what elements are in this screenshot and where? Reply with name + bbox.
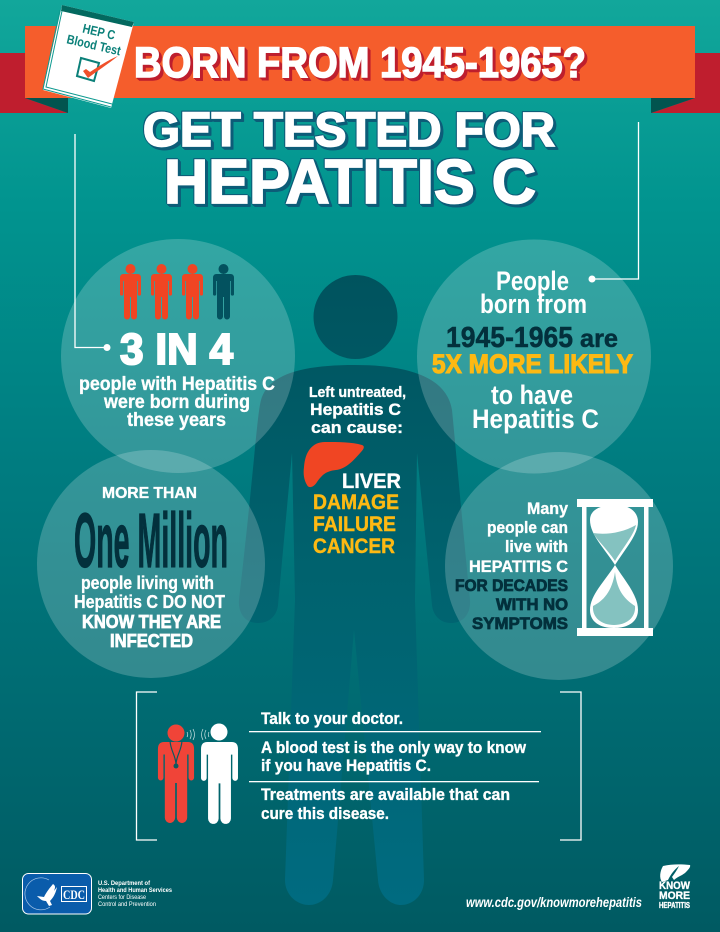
icon: doctor talking xyxy=(158,724,194,823)
text: people living with: KNOW THEY ARE xyxy=(82,612,221,632)
text: hhs agency: U.S. Department of xyxy=(98,880,151,887)
icon: four people, three highlighted xyxy=(120,264,234,320)
heading: born from: BORN FROM 1945-1965? xyxy=(134,39,586,87)
ribbon tails xyxy=(0,53,720,113)
bracket left xyxy=(136,692,157,840)
text: many people: WITH NO xyxy=(496,596,568,614)
checkbox xyxy=(77,56,118,81)
circle: one million xyxy=(37,450,265,678)
text: left untreated: Left untreated, xyxy=(309,384,406,401)
text: liver damage failure cancer: CANCER xyxy=(313,534,395,558)
text: liver damage failure cancer xyxy=(313,469,401,558)
connector line left xyxy=(75,134,110,351)
logo: cdc xyxy=(22,874,92,914)
text: liver damage failure cancer: LIVER xyxy=(342,469,401,493)
text: people with hepatitis c: people with Hepatitis C xyxy=(79,373,275,395)
text: people living with: Hepatitis C DO NOT xyxy=(74,592,225,612)
text: hhs agency xyxy=(98,880,172,908)
text: many people: HEPATITIS C xyxy=(469,558,568,576)
text: talk to your doctor: Talk to your doctor. xyxy=(261,709,403,728)
orange banner xyxy=(25,26,695,98)
text: 1945-1965 are: 1945-1965 xyxy=(446,322,573,354)
logo: cdc: CDC xyxy=(63,887,85,902)
text: liver damage failure cancer: DAMAGE xyxy=(313,490,399,514)
text: treatments: cure this disease. xyxy=(261,804,389,823)
text: many people: Many xyxy=(527,500,569,518)
divider one xyxy=(249,731,541,732)
circle: 5x more likely xyxy=(417,240,651,474)
text: blood test xyxy=(261,738,527,775)
icon: hourglass xyxy=(577,499,653,636)
logo: know more hepatitis: HEPATITIS xyxy=(659,901,691,910)
clipboard label xyxy=(65,18,126,59)
icon: blood test clipboard xyxy=(43,5,134,108)
text: liver damage failure cancer: FAILURE xyxy=(313,512,396,536)
text: many people: live with xyxy=(505,538,568,556)
text: people living with: people living with xyxy=(81,573,214,593)
circle: decades no symptoms xyxy=(445,452,673,680)
logo: know more hepatitis xyxy=(659,864,691,910)
clipboard label: Blood Test xyxy=(65,31,123,59)
title: get tested for: GET TESTED FOR xyxy=(143,104,555,157)
logo: know more hepatitis: MORE xyxy=(659,890,690,902)
divider two xyxy=(249,781,539,782)
text: people born from xyxy=(480,266,587,319)
text: people born from: born from xyxy=(480,289,587,319)
clipboard label: HEP C xyxy=(81,21,117,43)
circle: 3 in 4 xyxy=(61,239,295,473)
text: to have hepatitis c: Hepatitis C xyxy=(472,404,599,434)
text: treatments xyxy=(261,785,510,823)
text: many people xyxy=(455,500,569,633)
stat: 3 in 4: 3 IN 4 xyxy=(120,325,234,374)
text: 1945-1965 are: are xyxy=(580,325,618,353)
text: many people: people can xyxy=(487,519,568,537)
text: hhs agency: Centers for Disease xyxy=(98,894,146,901)
bracket right xyxy=(560,692,581,840)
text: blood test: A blood test is the only way to know xyxy=(261,738,527,757)
connector line right xyxy=(588,122,638,282)
icon: patient listening xyxy=(201,724,238,824)
text: many people: FOR DECADES xyxy=(455,577,568,595)
title: hepatitis c: HEPATITIS C xyxy=(164,148,536,217)
text: to have hepatitis c xyxy=(472,380,599,434)
text: more than: MORE THAN xyxy=(102,485,197,502)
text: people with hepatitis c: these years xyxy=(127,409,226,431)
text: website: www.cdc.gov/knowmorehepatitis xyxy=(466,895,642,910)
stat: 5x more likely: 5X MORE LIKELY xyxy=(432,349,633,379)
text: left untreated: can cause: xyxy=(311,418,403,437)
text: people born from: People xyxy=(496,266,569,296)
text: hhs agency: Health and Human Services xyxy=(98,887,172,894)
text: people living with: INFECTED xyxy=(110,631,193,651)
human body silhouette xyxy=(239,275,470,905)
text: people with hepatitis c: were born during xyxy=(103,391,250,413)
text: left untreated xyxy=(309,384,406,437)
text: One Million xyxy=(74,498,228,584)
text: people living with xyxy=(74,573,225,651)
text: many people: SYMPTOMS xyxy=(472,615,568,633)
logo: know more hepatitis: KNOW xyxy=(659,880,691,892)
hhs eagle emblem xyxy=(25,878,57,910)
icon: liver xyxy=(304,442,364,487)
text: to have hepatitis c: to have xyxy=(491,380,573,410)
text: left untreated: Hepatitis C xyxy=(310,400,401,419)
text: treatments: Treatments are available that can xyxy=(261,785,510,804)
text: people with hepatitis c xyxy=(79,373,275,431)
text: blood test: if you have Hepatitis C. xyxy=(261,756,431,775)
text: hhs agency: Control and Prevention xyxy=(98,901,156,908)
